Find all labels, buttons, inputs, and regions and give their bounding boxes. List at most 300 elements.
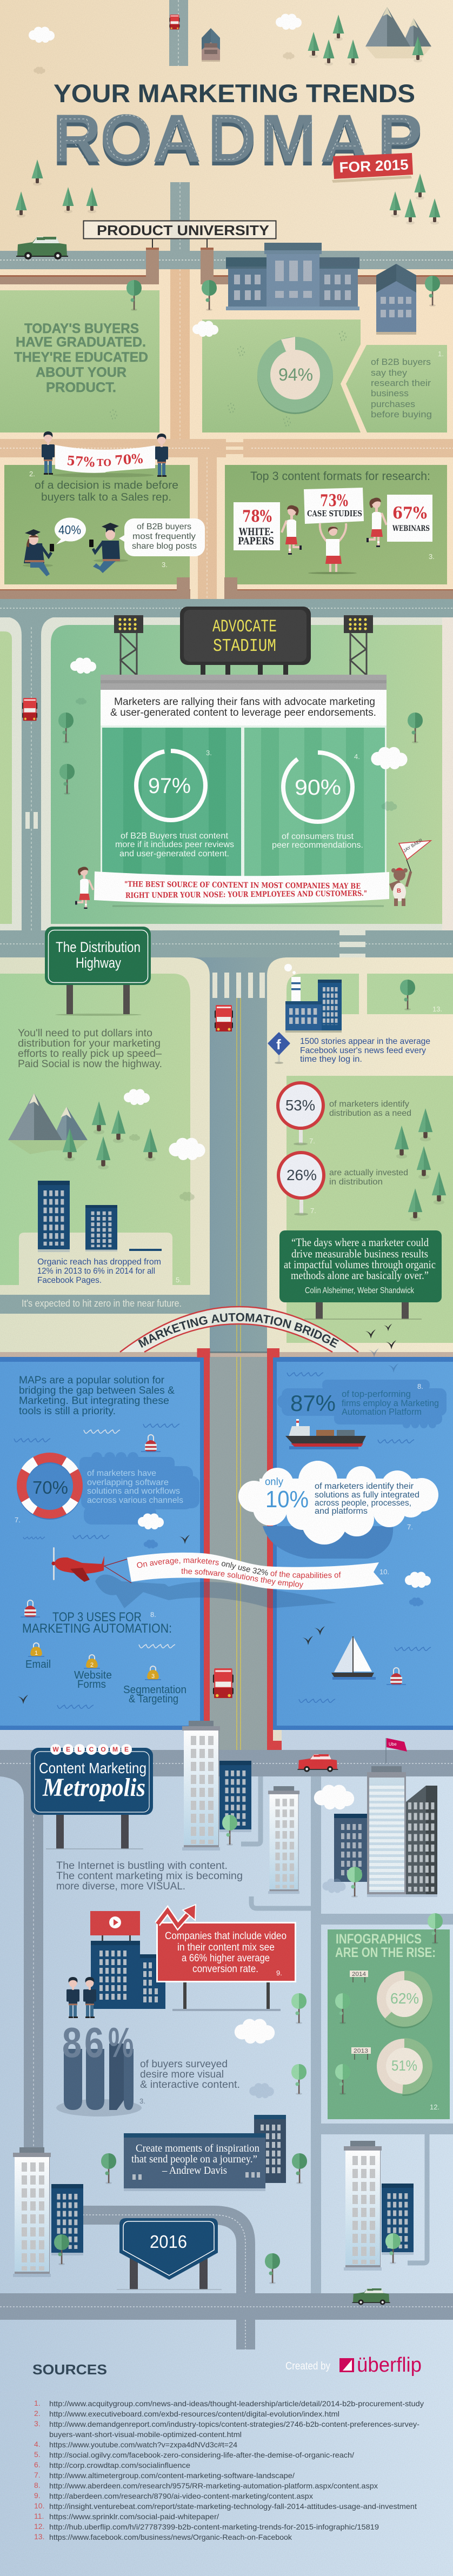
list: source numbers: 4. <box>34 2440 41 2448</box>
stadium ground <box>0 617 453 930</box>
panel: stadium intro text: & user-generated content to leverage peer endorsements. <box>110 707 376 718</box>
callout: 10% cloud: across people, processes, <box>315 1499 411 1508</box>
text: of B2B buyers: say they <box>371 368 408 378</box>
list: source URLs: http://social.ogilvy.com/facebook-zero-considering-life-after-the-demise-of-organic-reach/ <box>49 2451 354 2459</box>
card: 78% whitepapers: 78% <box>242 507 272 526</box>
footnote 2: 2. <box>29 470 35 478</box>
person left <box>42 431 55 475</box>
text: put dollars into distribution: efforts to really pick up speed– <box>18 1048 162 1060</box>
text: MAPs intro: Marketing. But integrating these <box>19 1395 169 1407</box>
list: source URLs: https://www.sprinklr.com/social-paid-whitepaper/ <box>49 2512 219 2521</box>
icon: uberflip flag: Ube <box>389 1742 397 1747</box>
left lawn strip <box>0 631 12 924</box>
callout: Jay Baer quote banner <box>94 871 389 906</box>
callout: Andrew Davis quote building: – Andrew Davis <box>162 2165 227 2176</box>
panel: Product University campus <box>0 182 453 600</box>
sign: The Distribution Highway <box>45 927 151 1016</box>
card: 73% case studies: CASE STUDIES <box>307 509 362 518</box>
icon: birds over lawn <box>365 1324 396 1349</box>
sign: Colin Alsheimer quote: “The days where a marketer could <box>291 1236 429 1249</box>
text: 53% explanation <box>329 1100 411 1118</box>
panel: Marketing Automation Bridge water <box>0 1306 453 1750</box>
callout: 10% cloud <box>238 1461 438 1545</box>
text: put dollars into distribution: Paid Social is now the highway. <box>18 1059 162 1070</box>
icon: red car <box>22 698 37 721</box>
text: 1500 stories: 1500 stories appear in the average <box>300 1037 430 1046</box>
icon: city trees <box>291 1993 307 2095</box>
welcome bulbs: L <box>77 1746 82 1753</box>
section ground <box>0 930 453 1357</box>
callout: average usage ribbon <box>127 1553 384 1590</box>
lawn lower right <box>225 465 447 584</box>
footnotes: 5. <box>176 1276 182 1284</box>
grass tufts on campus <box>61 331 346 573</box>
chart: 51% donut: 51% <box>391 2058 417 2074</box>
bridge ground band <box>0 1352 453 1357</box>
icon: cheerleader girl <box>75 867 93 909</box>
callout: expected to hit zero road <box>0 1295 210 1314</box>
icon: red car <box>297 1754 338 1772</box>
footnotes: 7. <box>309 1137 315 1145</box>
chart: soccer field left with 97%: 3. <box>206 749 212 757</box>
list: source numbers: 1. <box>34 2399 41 2407</box>
text: 87% explanation <box>342 1389 439 1417</box>
welcome bulbs: E <box>124 1746 129 1753</box>
dark blob behind 70% text <box>79 1452 199 1525</box>
icon: bear mascot with pennant: B <box>397 888 401 894</box>
card: 78% whitepapers: WHITE- <box>238 526 274 538</box>
card: 73% case studies <box>304 488 364 524</box>
text: 1500 stories: time they log in. <box>300 1055 362 1064</box>
text: of B2B buyers: purchases <box>371 399 415 409</box>
text: MAPs intro: bridging the gap between Sales & <box>19 1385 175 1396</box>
icon: quote trees <box>101 2153 307 2184</box>
sign: 53% stat <box>278 1083 323 1145</box>
list item: 3 segmentation <box>123 1666 186 1705</box>
footnotes: 8. <box>417 1382 423 1390</box>
icon: water waves <box>14 1373 431 1708</box>
list: source numbers <box>34 2399 44 2541</box>
icon: small house <box>202 28 220 62</box>
list: source numbers: 10. <box>34 2501 44 2510</box>
footnote 3: 3. <box>162 561 168 569</box>
sign: 2016 <box>117 2218 222 2289</box>
text: MAPs intro: tools is still a priority. <box>19 1406 116 1417</box>
icon: faint birds in water <box>368 1348 398 1373</box>
road to 2016 <box>83 2206 255 2349</box>
icon: two men <box>66 1977 96 2018</box>
icon: red car <box>215 1005 233 1031</box>
welcome bulbs: W <box>52 1746 59 1753</box>
text: Internet bustling: The Internet is bustling with content. <box>56 1860 228 1872</box>
text: of B2B buyers: business <box>371 388 409 398</box>
list item: 3 segmentation: 3 <box>151 1673 155 1680</box>
zigzag arrow <box>157 1905 196 1926</box>
list: source URLs: http://www.executiveboard.com/exbd-resources/content/digital-evolution/index.html <box>49 2409 339 2418</box>
sign: stadium scoreboard: STADIUM <box>213 636 276 656</box>
lawn right top <box>287 974 453 1014</box>
text: 86% explanation <box>140 2059 240 2091</box>
chart: soccer field right with 90%: 90% <box>295 776 341 800</box>
text: put dollars into distribution: You'll need to put dollars into <box>18 1028 152 1039</box>
lawn right lower <box>287 1076 453 1343</box>
list: source URLs: https://www.facebook.com/business/news/Organic-Reach-on-Facebook <box>49 2533 292 2541</box>
callout: 40% bubble <box>55 518 86 544</box>
sign: The Distribution Highway: Highway <box>76 955 121 971</box>
icon: sailboat <box>331 1636 376 1680</box>
sign: The Distribution Highway: The Distribution <box>56 939 141 955</box>
icon: side house <box>376 264 416 335</box>
panel: stadium intro text: Marketers are rallying their fans with advocate marketing <box>114 696 375 708</box>
icon: container ship <box>285 1419 366 1449</box>
chart: soccer field right with 90%: of consumers trust <box>282 832 354 841</box>
banner numbers: 57% <box>66 452 96 470</box>
callout: text bubble: of B2B buyers <box>137 522 191 531</box>
lawn left <box>0 290 159 432</box>
text: organic reach <box>37 1257 161 1285</box>
list item: 3 segmentation: & Targeting <box>129 1693 178 1705</box>
campus grounds <box>0 269 453 600</box>
banner numbers <box>66 450 143 470</box>
sign: Welcome to Content Marketing Metropolis: Metropolis <box>42 1773 145 1802</box>
chart: soccer field left with 97% <box>101 725 387 877</box>
stat: 86% road lettering: 8 <box>62 2019 82 2066</box>
bridge road <box>210 1352 267 1750</box>
text: decision stat <box>35 480 178 503</box>
icon: small round tree <box>400 980 415 1010</box>
stadium field <box>51 625 442 924</box>
icon: main university building <box>226 243 359 310</box>
text: 53% explanation: distribution as a need <box>329 1109 411 1118</box>
text: Internet bustling: more diverse, more VISUAL. <box>56 1881 185 1892</box>
sign: Colin Alsheimer quote <box>279 1230 442 1319</box>
credit: created by uberflip <box>285 2354 422 2377</box>
text: organic reach: 12% in 2013 to 6% in 2014 for all <box>37 1267 155 1276</box>
sign: Colin Alsheimer quote: drive measurable business results <box>291 1247 428 1260</box>
list: source numbers: 11. <box>34 2512 44 2520</box>
heading: today's buyers: HAVE GRADUATED. <box>16 335 146 350</box>
footnote 3 city: 3. <box>139 2097 145 2105</box>
text: MAPs intro: MAPs are a popular solution for <box>19 1375 165 1386</box>
year sign 2014 <box>350 1971 368 1982</box>
text: 53% explanation: of marketers identify <box>329 1100 409 1109</box>
list: source URLs: http://www.demandgenreport.com/industry-topics/content-strategies/2746-b2b-content-preferences-survey- <box>49 2420 419 2428</box>
text: decision stat: buyers talk to a Sales rep. <box>41 491 171 503</box>
city ground <box>0 1750 453 2576</box>
sign: Colin Alsheimer quote: at impactful volumes through organic <box>284 1258 436 1271</box>
callout: 66% conversion billboard: conversion rate. <box>192 1963 258 1975</box>
chart: soccer field right with 90%: 4. <box>354 753 360 761</box>
list: source URLs: http://www.acquitygroup.com/news-and-ideas/thought-leadership/article/detail/2014-b2b-procurement-study <box>49 2399 424 2408</box>
icon: highway clouds <box>124 1089 205 1160</box>
callout: 10% cloud: and platforms <box>315 1507 368 1516</box>
list: source numbers: 9. <box>34 2491 41 2500</box>
text: 86% explanation: of buyers surveyed <box>140 2059 228 2070</box>
list: source URLs: http://insight.venturebeat.com/report/state-marketing-technology-fall-2014-attitudes-usage-and-investment <box>49 2502 417 2511</box>
title: ROADMAP as road lettering: ROADMAP <box>52 105 422 180</box>
text: of B2B buyers: before buying <box>371 409 432 420</box>
stat: 86% road lettering: % <box>108 2020 134 2067</box>
icon: Facebook sign: f <box>276 1036 281 1053</box>
banner shape <box>55 445 155 473</box>
callout: 66% conversion billboard: a 66% higher average <box>182 1952 270 1964</box>
panel: Advocate Stadium <box>0 599 453 930</box>
icon: red car <box>213 1668 234 1698</box>
text: organic reach: Facebook Pages. <box>37 1276 102 1285</box>
heading: today's buyers: THEY'RE EDUCATED <box>14 350 148 365</box>
icon: campus round trees <box>126 276 440 311</box>
chart: soccer field left with 97%: of B2B Buyers trust content <box>121 831 229 841</box>
chart: 94% donut <box>257 337 333 414</box>
heading: today's buyers <box>14 321 148 395</box>
icon: running girl 1 <box>282 505 302 555</box>
callout: 66% conversion billboard: 9. <box>276 1969 282 1977</box>
person right <box>155 434 168 477</box>
icon: city clouds <box>235 1785 354 2044</box>
sign: 53% stat: 53% <box>285 1097 315 1114</box>
icon: birds on water <box>17 1535 351 1748</box>
water edges <box>0 1357 453 1730</box>
footnote 1: 1. <box>438 350 444 358</box>
panel: infographics on the rise: 12. <box>430 2103 439 2111</box>
card: 67% webinars: 67% <box>392 504 427 523</box>
callout: 10% cloud: of marketers identify their <box>315 1482 414 1491</box>
sign: stadium scoreboard <box>180 607 311 676</box>
icon: video billboard <box>90 1911 140 1942</box>
campus wall and gates <box>0 248 453 284</box>
callout: 66% conversion billboard: Companies that include video <box>165 1930 287 1942</box>
vertical road <box>10 617 53 930</box>
icon: running girl 2 <box>367 498 387 547</box>
chart: soccer field left with 97%: more if it includes peer reviews <box>115 840 234 849</box>
welcome bulbs <box>50 1744 132 1755</box>
list: source URLs: http://www.aberdeen.com/research/9575/RR-marketing-automation-platform.aspx/content.aspx <box>49 2481 378 2490</box>
list item: 1 email: 1 <box>35 1650 38 1656</box>
stadium road <box>0 599 453 617</box>
highway vertical road <box>189 957 287 1357</box>
sign: Colin Alsheimer quote: Colin Alsheimer, Weber Shandwick <box>305 1286 415 1295</box>
icon: faint water clouds <box>144 1540 423 1606</box>
chart: soccer field left with 97%: 97% <box>148 774 191 798</box>
icon: faint cloud shadows <box>34 52 295 74</box>
list item: 2 website forms: Website <box>74 1669 112 1681</box>
icon: stadium trees <box>58 713 423 795</box>
text: 70% explanation: overlapping software <box>87 1478 169 1487</box>
footnotes: 7. <box>407 1523 413 1531</box>
sign: Marketing Automation Bridge arch: MARKETING AUTOMATION BRIDGE <box>138 1313 339 1348</box>
city left road <box>0 1776 43 2147</box>
lawn left <box>0 974 190 1285</box>
welcome bulbs: O <box>101 1746 106 1753</box>
welcome bulbs: M <box>112 1746 118 1753</box>
icon: left conifers <box>63 1101 157 1169</box>
icon: right conifers <box>395 1108 446 1221</box>
bank <box>0 1730 204 1750</box>
heading: top 3 uses: TOP 3 USES FOR <box>52 1610 142 1625</box>
chart: 51% donut <box>377 2039 432 2094</box>
list item: 2 website forms <box>74 1655 112 1690</box>
credit: created by uberflip: Created by <box>285 2360 330 2372</box>
icon: navy buildings with video <box>91 1941 165 2009</box>
list: source numbers: 13. <box>34 2532 44 2541</box>
footnotes: 8. <box>150 1610 156 1619</box>
icon: faint city clouds <box>249 1879 346 2098</box>
text: 87% explanation: Automation Platform <box>342 1407 422 1417</box>
callout: 57% to 70% banner <box>42 431 168 477</box>
text: of B2B buyers <box>371 357 432 420</box>
sign: Product University <box>83 221 276 248</box>
sign: 26% stat: 26% <box>287 1167 317 1183</box>
list: source numbers: 8. <box>34 2481 41 2490</box>
footnote 3 right: 3. <box>429 553 435 561</box>
text: 26% explanation: in distribution <box>329 1177 383 1187</box>
text: 26% explanation <box>329 1168 408 1187</box>
sign: Colin Alsheimer quote: methods alone are basically over.” <box>291 1269 429 1282</box>
list: source URLs: http://corp.crowdtap.com/socialinfluence <box>49 2461 190 2470</box>
heading: sources: SOURCES <box>32 2361 107 2378</box>
card: 73% case studies: 73% <box>320 491 348 510</box>
lawn right <box>346 345 447 432</box>
title: YOUR MARKETING TRENDS <box>54 79 415 108</box>
water right <box>273 1357 453 1726</box>
text: 1500 stories: Facebook user's news feed every <box>300 1046 426 1055</box>
footnotes: 7. <box>310 1207 316 1215</box>
icon: Facebook sign <box>269 1033 289 1064</box>
chart: lifebuoy 70% <box>17 1454 83 1520</box>
year sign 2014: 2014 <box>352 1971 366 1978</box>
icon: uberflip flag <box>386 1738 407 1763</box>
text: of B2B buyers: of B2B buyers <box>371 357 431 367</box>
stat: 87%: 87% <box>290 1390 336 1416</box>
year sign 2013: 2013 <box>354 2048 368 2054</box>
plane and banner shadow <box>95 1574 336 1608</box>
text: 70% explanation: solutions and workflows <box>87 1487 180 1496</box>
icon: tree <box>222 1815 237 1846</box>
campus vertical road <box>170 182 190 251</box>
card: 78% whitepapers: PAPERS <box>238 535 274 547</box>
callout: 10% cloud: 10% <box>265 1486 309 1513</box>
icon: clouds over the header <box>29 14 302 43</box>
heading: top 3 uses <box>22 1610 172 1636</box>
bank right <box>282 1730 453 1750</box>
icon: cloud on path <box>192 321 218 337</box>
icon: green car <box>352 2288 390 2305</box>
vertical campus path lower <box>198 457 217 599</box>
panel: header map background <box>0 0 453 600</box>
icon: middle conifers <box>15 159 440 225</box>
heading: today's buyers: TODAY'S BUYERS <box>24 321 139 336</box>
icon: lower tree left <box>54 2234 69 2265</box>
dark blob behind 87% text <box>277 1380 447 1428</box>
text: Internet bustling <box>56 1860 243 1892</box>
list: source numbers: 2. <box>34 2409 41 2418</box>
banner numbers: TO <box>97 457 111 469</box>
callout: Andrew Davis quote building: that send people on a journey.” <box>131 2153 257 2165</box>
credit: created by uberflip: überflip <box>357 2354 422 2377</box>
icon: red buoys <box>21 1435 406 1685</box>
text: MAPs intro <box>19 1375 175 1417</box>
callout: Jay Baer quote banner: "THE BEST SOURCE OF CONTENT IN MOST COMPANIES MAY BE <box>124 880 361 891</box>
chart: organic reach buildings <box>38 1181 162 1252</box>
icon: lower right tree <box>385 2233 401 2264</box>
water left <box>0 1357 204 1726</box>
callout: average usage ribbon: the software solutions they employ <box>181 1568 304 1589</box>
icon: bear mascot with pennant <box>389 837 431 906</box>
text: put dollars into distribution <box>18 1028 162 1070</box>
callout: text bubble: most frequently <box>132 532 196 541</box>
icon: red car on top road <box>169 15 179 29</box>
callout: 66% conversion billboard <box>156 1905 296 2011</box>
lawn with donut <box>202 319 361 432</box>
panel: infographics on the rise <box>328 1913 450 2119</box>
icon: seated graduate girl <box>23 529 54 576</box>
list: source numbers: 12. <box>34 2522 44 2531</box>
heading: today's buyers: ABOUT YOUR <box>36 365 126 380</box>
horizontal campus path <box>0 439 453 457</box>
panel: Content Marketing Metropolis <box>0 1721 453 2576</box>
chart: soccer field left with 97%: and user-generated content. <box>119 849 229 858</box>
heading: top 3 content formats: Top 3 content formats for research: <box>250 469 430 483</box>
icon: mountains <box>365 7 431 58</box>
title: ROADMAP as road lettering: ROADMAP <box>52 101 422 176</box>
sign: 26% stat <box>278 1153 324 1215</box>
lawn lower left <box>4 465 190 584</box>
callout: FOR 2015 tag: FOR 2015 <box>339 156 409 176</box>
list: source URLs: buyers-want-short-visual-mobile-optimized-content.html <box>49 2430 242 2439</box>
panel: stadium intro text <box>101 690 387 725</box>
banner numbers: 70% <box>114 450 143 468</box>
callout: Andrew Davis quote building: Create moments of inspiration <box>136 2142 259 2154</box>
icon: cheering girl <box>308 523 357 574</box>
right edge strip <box>442 617 453 930</box>
list: source URLs <box>49 2399 424 2541</box>
welcome bulbs: C <box>89 1746 94 1753</box>
icon: lower left towers <box>13 2147 83 2277</box>
chart: 62% donut: 62% <box>390 1990 419 2007</box>
icon: stadium clouds <box>70 657 408 769</box>
footnotes <box>176 1005 442 1284</box>
footnotes: 7. <box>15 1516 21 1524</box>
sign: Welcome to Content Marketing Metropolis <box>31 1744 153 1849</box>
callout: 40% bubble: 40% <box>58 523 81 537</box>
callout: 10% cloud: only <box>265 1476 283 1488</box>
callout: expected to hit zero road: It's expected to hit zero in the near future. <box>22 1298 182 1309</box>
sign: 2016: 2016 <box>150 2232 187 2252</box>
icon: bear mascot with pennant: JAY BAER <box>402 837 423 854</box>
text: 86% explanation: & interactive content. <box>140 2079 240 2091</box>
icon: scoreboard towers <box>114 615 373 675</box>
city upper road <box>0 1750 453 1776</box>
welcome bulbs: E <box>66 1746 70 1753</box>
text: decision stat: of a decision is made before <box>35 480 178 491</box>
list item: 2 website forms: Forms <box>77 1679 106 1690</box>
text: 87% explanation: firms employ a Marketing <box>342 1399 439 1408</box>
chart: soccer field right with 90% <box>244 728 385 877</box>
list item: 1 email <box>25 1643 51 1670</box>
list: source URLs: http://hub.uberflip.com/h/i/27787399-b2b-content-marketing-trends-for-2015-infographic/15819 <box>49 2522 379 2531</box>
list: source numbers: 5. <box>34 2450 41 2459</box>
panel: infographics on the rise: INFOGRAPHICS <box>336 1932 422 1947</box>
campus path <box>170 269 190 440</box>
main city road <box>0 2293 453 2320</box>
text: 1500 stories <box>300 1037 430 1064</box>
text: 26% explanation: are actually invested <box>329 1168 408 1177</box>
chart: 62% donut <box>377 1971 432 2026</box>
callout: text bubble: share blog posts <box>132 542 197 551</box>
text: 86% explanation: desire more visual <box>140 2069 224 2080</box>
icon: right cluster <box>334 1766 437 1897</box>
text: 70% explanation <box>87 1469 183 1505</box>
